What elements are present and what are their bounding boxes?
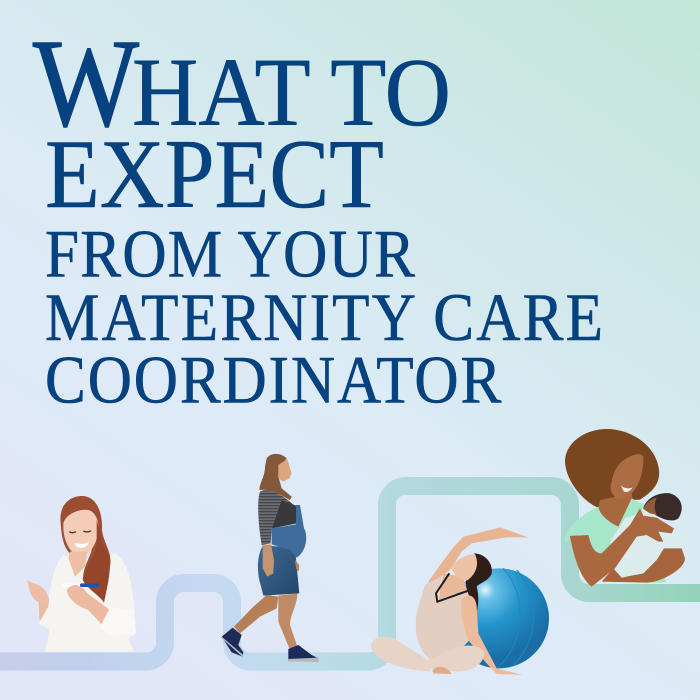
lower arm <box>602 548 685 583</box>
face <box>278 459 292 482</box>
far hand <box>295 560 299 572</box>
shoe soles <box>221 637 319 662</box>
neck <box>598 493 635 528</box>
front leg <box>278 593 297 648</box>
afro hair <box>565 429 659 508</box>
baby head <box>643 493 682 520</box>
face <box>451 554 477 581</box>
heading: What to: W <box>33 15 139 153</box>
back shoe <box>222 628 243 657</box>
heading: What to <box>33 15 451 153</box>
smile <box>621 486 633 492</box>
left hand <box>27 580 49 604</box>
back leg <box>234 595 278 633</box>
face <box>63 510 98 556</box>
neck <box>438 573 467 600</box>
exercise ball <box>449 568 549 668</box>
subheading: from your: FROM YOUR <box>45 216 416 291</box>
face <box>611 454 643 500</box>
raised arm <box>427 527 528 583</box>
illustration: walking pregnant woman <box>221 454 319 662</box>
rolled sleeve <box>99 607 136 637</box>
subheading: coordinator: COORDINATOR <box>45 342 502 417</box>
test stick <box>61 583 99 587</box>
smile <box>74 542 89 548</box>
baby face <box>643 498 657 515</box>
illustration: prenatal exercise with ball <box>371 527 549 675</box>
illustration: mother holding newborn <box>563 429 686 587</box>
hair <box>466 553 492 615</box>
right hand and forearm <box>67 585 110 629</box>
striped top <box>258 490 297 545</box>
hair <box>259 454 292 500</box>
bare foot <box>433 667 452 674</box>
mint shirt <box>563 498 667 583</box>
overalls belly <box>272 505 306 558</box>
eyes <box>69 531 91 533</box>
left forearm <box>38 593 49 623</box>
dark chest <box>272 500 297 528</box>
heading: What to: HAT TO <box>132 39 451 146</box>
front arm <box>461 595 523 675</box>
neck <box>68 552 87 577</box>
heading: Expect: EXPECT <box>45 120 384 229</box>
white shirt <box>38 553 136 652</box>
hair lock <box>83 520 110 602</box>
hair back <box>60 496 111 603</box>
bra straps <box>436 573 468 602</box>
illustration: woman with pregnancy test <box>27 496 136 652</box>
subheading: maternity care: MATERNITY CARE <box>45 279 603 355</box>
winding journey ribbon <box>0 486 700 662</box>
crossed legs <box>371 637 484 672</box>
arm and hand over baby <box>570 508 674 587</box>
baby body <box>610 512 686 578</box>
arm <box>263 544 274 577</box>
title <box>33 15 603 417</box>
denim skirt <box>258 545 299 596</box>
front shoe <box>288 645 318 662</box>
leotard body <box>416 577 477 662</box>
